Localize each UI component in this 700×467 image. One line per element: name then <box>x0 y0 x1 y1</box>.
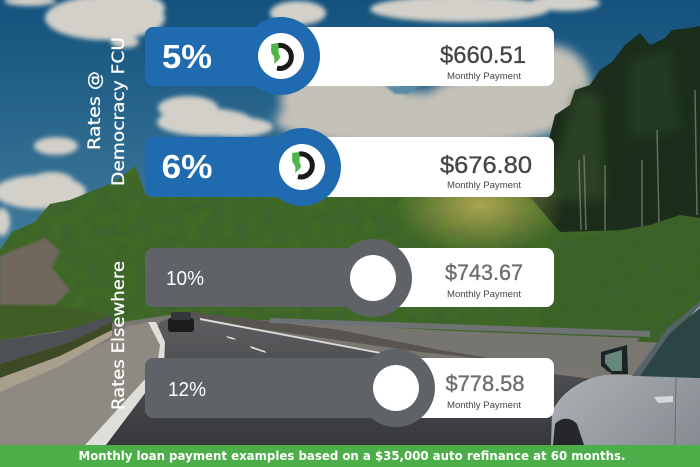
label: Rates @ Democracy FCU: Rates @ <box>85 71 104 150</box>
payment panel <box>270 137 554 197</box>
row: 5% Democracy FCU rate <box>145 17 554 95</box>
payment panel: Monthly Payment <box>447 400 522 410</box>
road surface <box>100 316 700 445</box>
tree highlights and trunks <box>530 50 697 232</box>
icon: Democracy FCU logo <box>292 152 312 177</box>
white road edge <box>85 322 165 445</box>
distant car <box>168 312 194 332</box>
right foreground bushes <box>540 215 700 350</box>
payment panel: $676.80 <box>440 152 532 179</box>
rocky slope <box>0 238 70 306</box>
payment panel: Monthly Payment <box>447 71 522 81</box>
tall trees on the right <box>520 26 700 320</box>
rate pill <box>145 349 435 427</box>
payment panel: Monthly Payment <box>447 289 522 299</box>
rate pill: 10% <box>166 268 204 290</box>
payment panel: $778.58 <box>446 371 524 396</box>
payment panel: $660.51 <box>440 42 526 69</box>
left verge greenery <box>0 305 110 345</box>
label: Rates Elsewhere: Rates Elsewhere <box>109 261 128 410</box>
label: Rates @ Democracy FCU: Democracy FCU <box>109 37 128 186</box>
lane dashes <box>226 336 266 353</box>
rate pill <box>145 239 412 317</box>
payment panel: $743.67 <box>445 260 523 285</box>
silver car <box>551 301 700 445</box>
left guardrail <box>0 316 112 364</box>
rate pill <box>145 128 341 206</box>
row: 6% Democracy FCU rate <box>145 128 554 206</box>
row: 12% elsewhere rate <box>145 349 554 427</box>
rate pill: 6% <box>162 148 212 185</box>
concrete barrier <box>0 330 112 392</box>
rate pill <box>145 17 320 95</box>
footer note banner: Monthly loan payment examples based on a $35,000 auto refinance at 60 months. <box>78 448 626 463</box>
payment panel <box>340 248 554 307</box>
rate pill: 12% <box>168 379 206 401</box>
sunlight glow through trees <box>395 155 565 255</box>
payment panel <box>360 358 554 418</box>
ground base <box>0 315 700 445</box>
payment panel: Monthly Payment <box>447 180 522 190</box>
icon: Democracy FCU logo <box>271 43 291 68</box>
footer note banner <box>0 445 700 467</box>
payment panel <box>250 27 554 86</box>
clouds <box>0 0 600 236</box>
far guardrails <box>190 312 610 372</box>
forested hillside <box>0 166 700 345</box>
concrete shoulder <box>0 322 163 445</box>
label: Rates @ Democracy FCU <box>85 37 128 186</box>
rate pill: 5% <box>162 38 212 75</box>
row: 10% elsewhere rate <box>145 239 554 317</box>
